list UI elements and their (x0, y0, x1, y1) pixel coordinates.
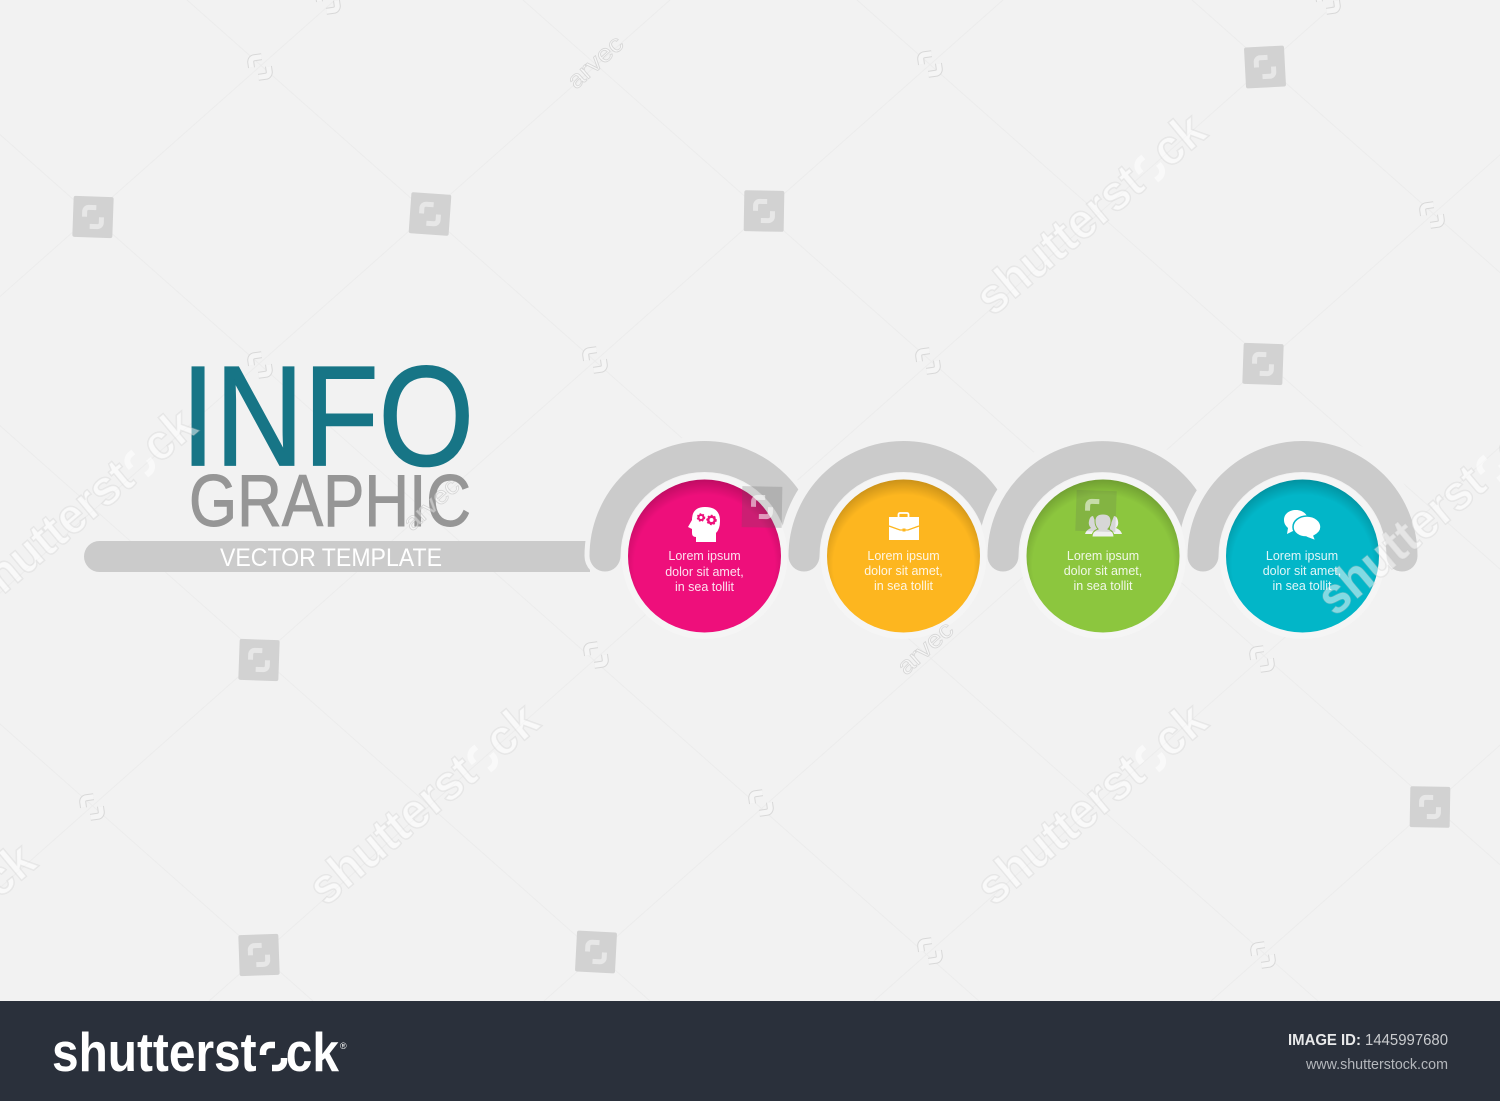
step 1 text: dolor sit amet, (665, 565, 744, 579)
step 4 text: Lorem ipsum (1266, 549, 1338, 563)
step 4 text: in sea tollit (1272, 579, 1332, 593)
step 1 text: in sea tollit (675, 580, 735, 594)
step 4 text (1263, 549, 1341, 593)
watermark: badges over circles (742, 486, 1117, 532)
bar behind vector template label (84, 541, 590, 572)
step 1 text: Lorem ipsum (668, 549, 741, 563)
icon: group of people (1085, 514, 1122, 537)
step 1 text (665, 549, 744, 594)
step 2 text: Lorem ipsum (867, 549, 940, 563)
title: GRAPHIC: GRAPHIC (189, 461, 471, 542)
watermark: arvec text (398, 30, 959, 680)
step 3 text (1064, 549, 1142, 593)
watermark: small outline marks (82, 0, 1442, 966)
step 3 text: in sea tollit (1073, 579, 1133, 593)
subtitle: vector template: VECTOR TEMPLATE (220, 544, 442, 572)
watermark: arvec text: arvec (398, 472, 465, 536)
footer image id: IMAGE ID: 1445997680 (1288, 1032, 1448, 1049)
step 3 text: Lorem ipsum (1067, 549, 1139, 563)
watermark: grey badges (72, 45, 1450, 976)
footer bar (0, 1001, 1500, 1101)
icon: briefcase (889, 513, 919, 540)
title: INFO: INFO (181, 337, 474, 496)
step 2: amber circle (820, 473, 986, 639)
step 4: teal circle (1220, 473, 1386, 639)
footer website: www.shutterstock.com (1305, 1057, 1448, 1073)
watermark: shutterstock text: shutterstock (965, 691, 1217, 915)
watermark: arvec text: arvec (562, 30, 629, 94)
step 3: green circle (1020, 473, 1186, 639)
watermark: arvec text: arvec (892, 616, 959, 680)
step 2 text: dolor sit amet, (864, 564, 943, 578)
step 3 text: dolor sit amet, (1064, 564, 1142, 578)
icon: head with gears (688, 507, 720, 542)
watermark: shutterstock text: shutterstock (964, 101, 1216, 325)
watermark: shutterstock text: shutterstock (297, 691, 549, 915)
footer logo: shutterstock: ® (340, 1041, 347, 1051)
step 4 text: dolor sit amet, (1263, 564, 1341, 578)
step 2 text (864, 549, 943, 593)
icon: speech bubbles (1284, 510, 1321, 541)
step 1: magenta circle (622, 473, 788, 639)
footer logo: shutterstock: shutterstock (52, 1021, 339, 1083)
step 2 text: in sea tollit (874, 579, 934, 593)
arcs connecting the steps (605, 456, 1402, 556)
